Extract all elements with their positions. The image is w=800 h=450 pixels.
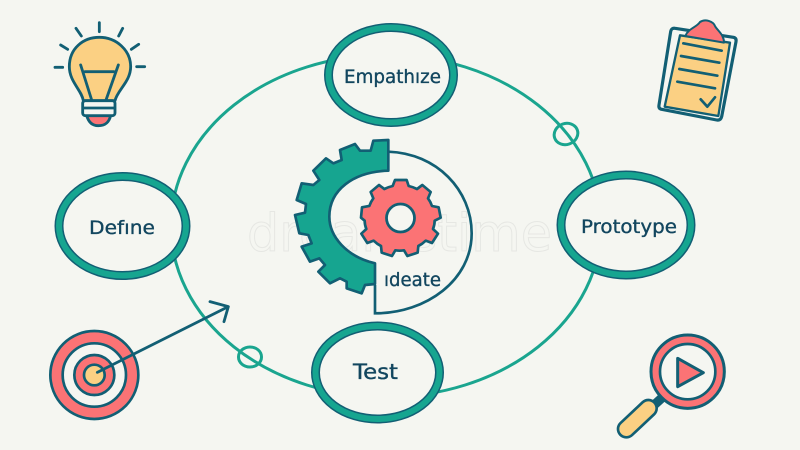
node: Empathize <box>328 28 454 122</box>
watermark: dreamstime <box>247 204 552 264</box>
node: Test: Test <box>352 360 398 384</box>
icon: target with arrow <box>50 302 228 419</box>
red gear <box>361 180 441 256</box>
green half gear <box>295 140 388 293</box>
node: Prototype: Prototype <box>581 216 677 238</box>
ring connector: upper right <box>551 120 581 148</box>
node: Define <box>59 176 186 276</box>
cycle ring <box>171 55 601 397</box>
icon: magnifier with play <box>626 335 724 429</box>
icon: clipboard <box>659 20 736 120</box>
icon: light bulb <box>55 23 145 126</box>
central gear graphic <box>295 140 472 313</box>
node: Prototype <box>561 175 691 275</box>
half circle outline <box>375 152 472 313</box>
gear hole <box>386 204 414 232</box>
node: Define: Defıne <box>89 217 155 239</box>
ring connector: lower left <box>238 347 262 367</box>
node: Empathize: Empathıze <box>344 66 441 88</box>
node: Test <box>316 326 440 419</box>
label: ideate: ıdeate <box>384 269 441 291</box>
